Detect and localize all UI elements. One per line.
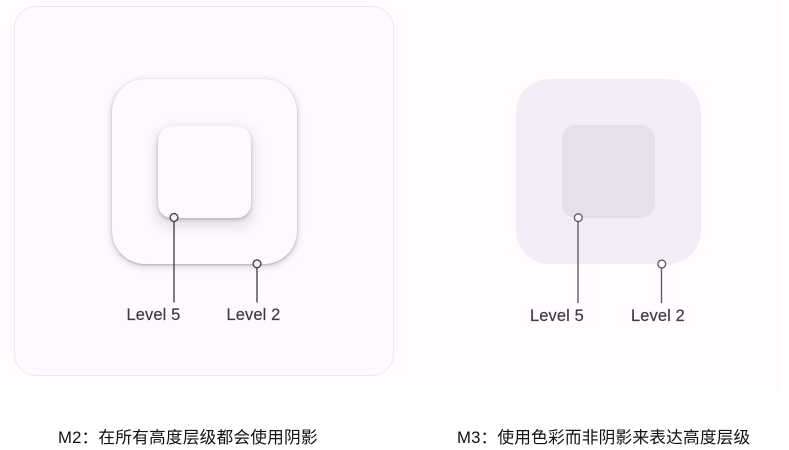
- label: M2 Level 5: Level 5: [126, 306, 180, 324]
- label: M3 Level 2: Level 2: [631, 307, 685, 325]
- M3 level 5 marker: [574, 214, 582, 303]
- label: M2 Level 2: Level 2: [226, 306, 280, 324]
- M2 level 5 surface: [158, 126, 250, 218]
- M2 level 2 surface: [112, 79, 297, 264]
- panel: M3 tonal elevation level 2 surface: [516, 79, 701, 264]
- M2 level 2 marker: [253, 260, 261, 302]
- label: M3 Level 5: Level 5: [530, 307, 584, 325]
- caption: M2: M2：在所有高度层级都会使用阴影: [58, 428, 318, 447]
- M3 level 5 surface: [562, 125, 655, 218]
- caption: M3: M3：使用色彩而非阴影来表达高度层级: [457, 428, 750, 447]
- M3 level 2 marker: [658, 260, 666, 303]
- panel: M2 shadow elevation: [14, 6, 394, 376]
- M2 level 5 marker: [170, 214, 178, 302]
